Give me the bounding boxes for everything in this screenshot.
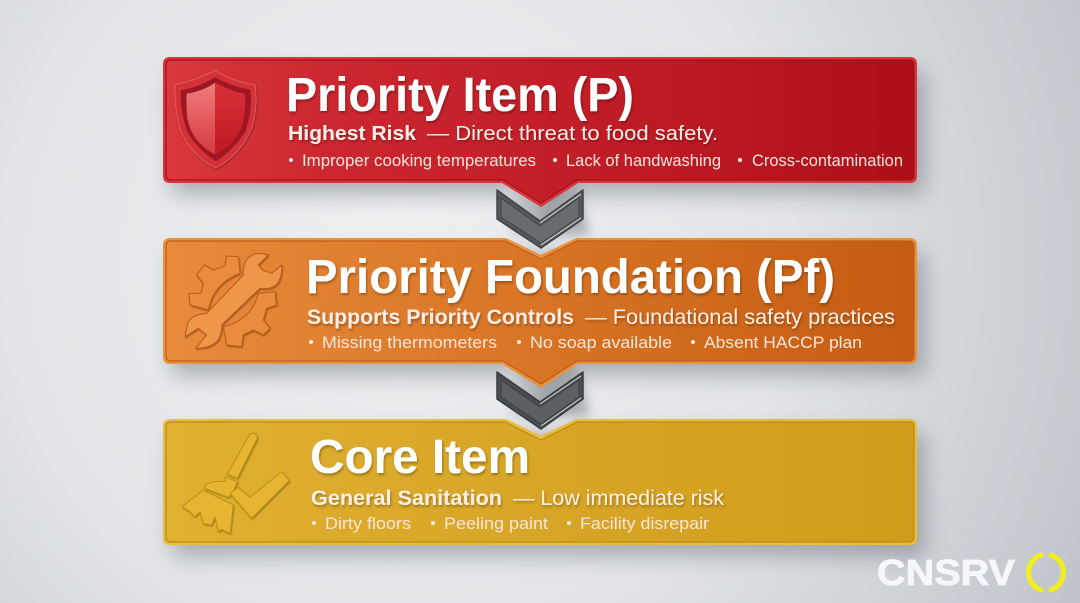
text: priority foundation examples — [309, 334, 862, 352]
arrow: chevron from priority foundation to core item — [497, 364, 590, 429]
icon: gear and wrench — [185, 253, 282, 348]
text: priority item examples: Lack of handwashing — [566, 152, 721, 170]
logo: CNSRV — [877, 552, 1064, 593]
text: core item examples: Facility disrepair — [580, 515, 710, 533]
text: priority item description: Highest Risk — [288, 123, 417, 145]
icon: broom and check — [182, 433, 289, 533]
text: core item description: General Sanitation — [311, 486, 502, 510]
text: priority foundation description: Supports Priority Controls — [307, 305, 574, 329]
icon: shield — [175, 70, 256, 168]
text: priority item examples: Improper cooking temperatures — [302, 152, 536, 170]
panel: core item — [163, 419, 917, 545]
panel: priority foundation — [163, 238, 917, 388]
text: core item description: — Low immediate risk — [507, 486, 724, 510]
heading: priority item: Priority Item (P) — [286, 69, 634, 122]
panel shadows — [172, 72, 924, 556]
text: core item examples: Peeling paint — [444, 515, 548, 533]
text: priority foundation examples: Missing thermometers — [322, 334, 497, 352]
text: priority item examples: Cross-contamination — [752, 152, 903, 170]
text: core item examples — [312, 515, 710, 533]
arrow: chevron from priority item to priority foundation — [497, 183, 590, 248]
text: priority item examples — [289, 152, 903, 170]
text: core item examples: Dirty floors — [325, 515, 411, 533]
text: priority foundation examples: Absent HACCP plan — [704, 334, 862, 352]
panel: priority item — [163, 57, 917, 207]
logo: CNSRV: CNSRV — [877, 552, 1015, 593]
text: priority item description: — Direct threat to food safety. — [421, 122, 718, 145]
heading: core item: Core Item — [310, 431, 530, 484]
text: priority foundation description: — Foundational safety practices — [579, 305, 895, 329]
text: priority foundation examples: No soap available — [530, 334, 672, 352]
heading: priority foundation: Priority Foundation (Pf) — [306, 251, 835, 304]
